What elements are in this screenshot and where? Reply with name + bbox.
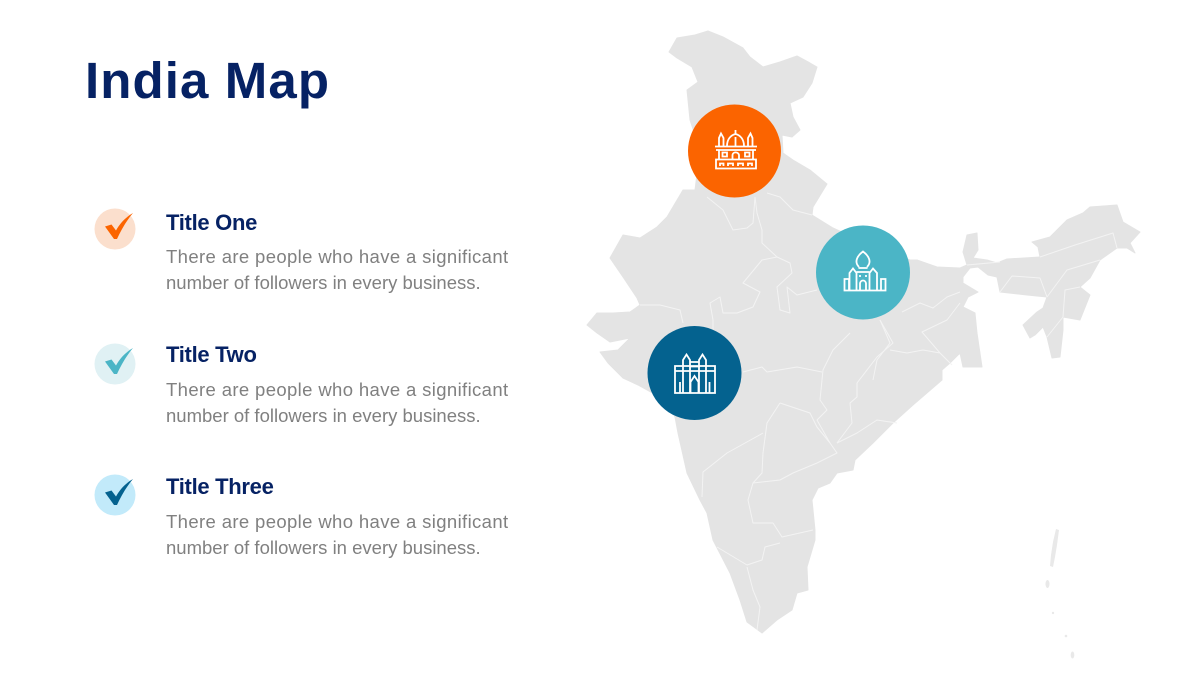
heading: Title Two: Title Two (166, 342, 257, 367)
icon: palace (715, 130, 757, 168)
title: India Map (85, 52, 330, 109)
text: Title One description (166, 246, 508, 293)
icon: mausoleum (844, 252, 886, 290)
heading: Title Three: Title Three (166, 474, 274, 499)
marker: orange circle with palace icon (688, 104, 781, 198)
icon: gate (675, 354, 715, 393)
list item: Title Three (94, 474, 136, 516)
icon: blue check (94, 474, 136, 516)
text: Title Three description: There are people who have a significant (166, 511, 508, 532)
text: Title One description: There are people who have a significant (166, 246, 508, 267)
list item: Title One (94, 208, 136, 250)
heading: Title One: Title One (166, 210, 257, 235)
text: Title One description: number of followers in every business. (166, 272, 481, 292)
text: Title Two description (166, 379, 508, 426)
text: Title Three description (166, 511, 508, 558)
map: Andaman and Nicobar islands (1046, 529, 1074, 658)
marker: blue circle with gate icon (648, 326, 742, 420)
map: India (587, 31, 1140, 658)
text: Title Two description: number of followers in every business. (166, 404, 481, 426)
text: Title Two description: There are people who have a significant (166, 379, 508, 400)
text: Title Three description: number of followers in every business. (166, 536, 481, 558)
icon: teal check (94, 344, 136, 384)
list item: Title Two (94, 344, 136, 384)
marker: teal circle with mausoleum icon (816, 226, 910, 320)
icon: orange check (94, 208, 136, 250)
